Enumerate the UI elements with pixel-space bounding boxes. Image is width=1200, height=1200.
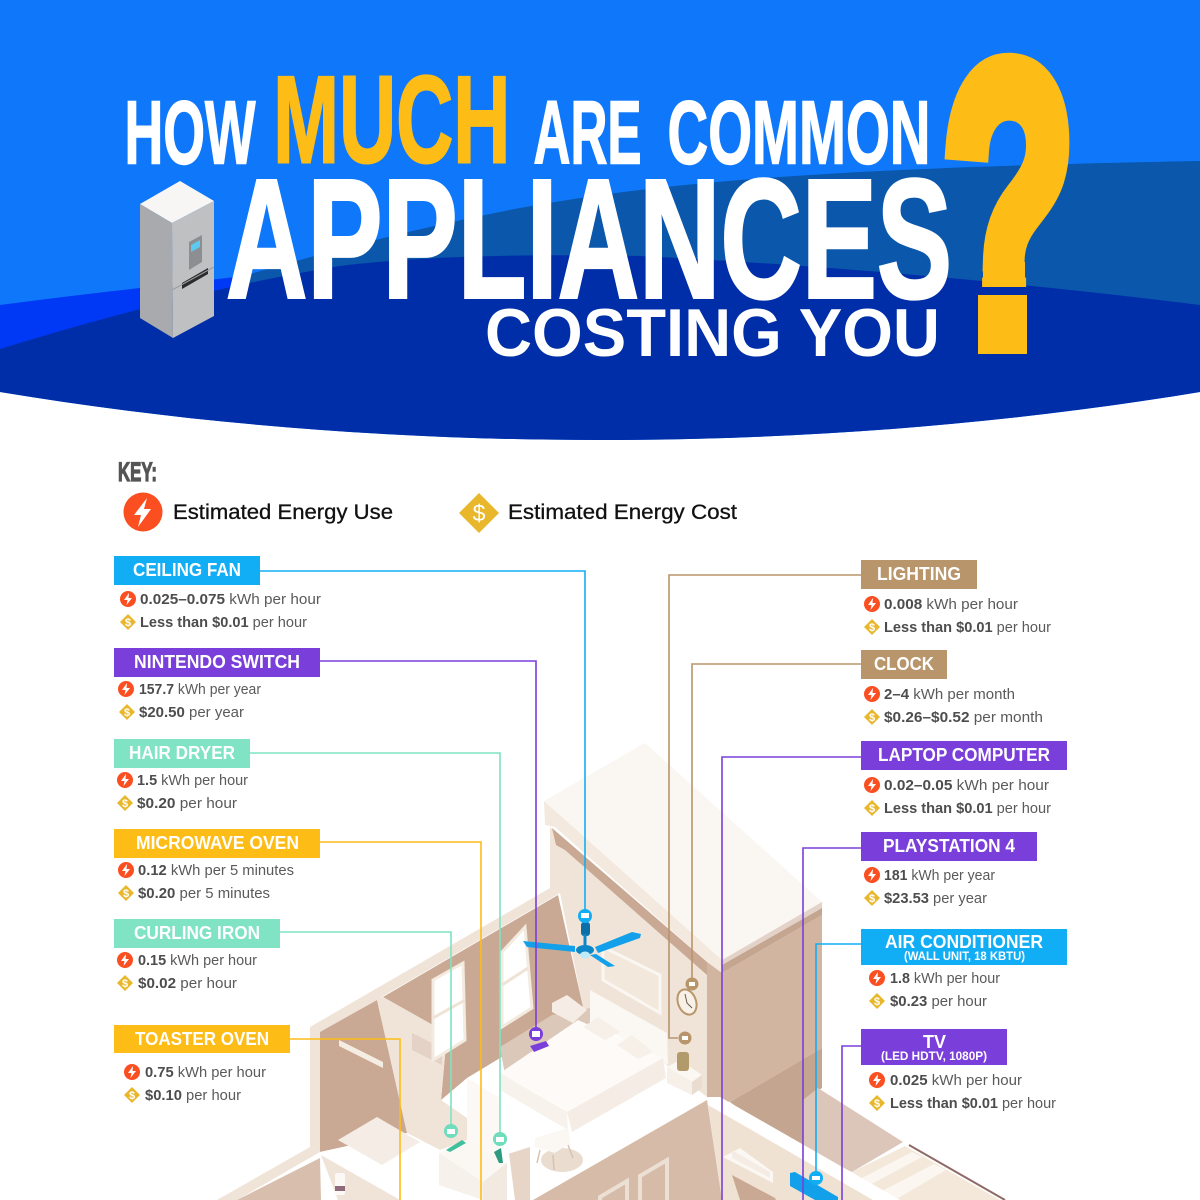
panel: curling iron: $0.02 per hour bbox=[138, 976, 237, 992]
panel: toaster oven bbox=[114, 1025, 290, 1104]
panel: tv: $ bbox=[874, 1098, 880, 1110]
panel: ceiling fan: CEILING FAN bbox=[133, 560, 241, 580]
panel: curling iron bbox=[114, 919, 280, 992]
panel: air conditioner: AIR CONDITIONER bbox=[885, 932, 1043, 952]
panel: tv: TV bbox=[923, 1032, 946, 1052]
panel: hair dryer: $ bbox=[122, 798, 128, 810]
panel: nintendo switch bbox=[114, 648, 320, 721]
key: Estimated Energy Use bbox=[173, 501, 393, 524]
panel: air conditioner: (WALL UNIT, 18 KBTU) bbox=[904, 951, 1025, 963]
bench bbox=[552, 995, 587, 1023]
panel: nintendo switch: NINTENDO SWITCH bbox=[134, 652, 300, 672]
windows bbox=[433, 927, 532, 1060]
panel: curling iron: $ bbox=[122, 978, 128, 990]
panel: air conditioner: $0.23 per hour bbox=[890, 994, 987, 1010]
panel: playstation 4: 181 kWh per year bbox=[884, 868, 995, 884]
connector end icons bbox=[444, 909, 823, 1185]
connector lines bbox=[250, 571, 861, 1200]
key: KEY: bbox=[118, 457, 157, 487]
panel: ceiling fan: Less than $0.01 per hour bbox=[140, 615, 307, 631]
roof and gable bbox=[544, 743, 903, 1172]
bedroom walls bbox=[310, 888, 583, 1152]
panel: hair dryer: 1.5 kWh per hour bbox=[137, 773, 248, 789]
panel: microwave oven bbox=[114, 829, 320, 902]
panel: playstation 4: $23.53 per year bbox=[884, 891, 987, 907]
panel: clock: $0.26–$0.52 per month bbox=[884, 710, 1043, 726]
bedroom floor bbox=[467, 1008, 707, 1188]
panel: tv bbox=[861, 1029, 1056, 1112]
panel: microwave oven: 0.12 kWh per 5 minutes bbox=[138, 863, 294, 879]
key: Estimated Energy Cost bbox=[508, 501, 737, 524]
panel: clock: $ bbox=[869, 712, 875, 724]
panel: toaster oven: $ bbox=[129, 1090, 135, 1102]
icon: refrigerator bbox=[140, 181, 214, 338]
key bbox=[118, 457, 737, 533]
panel: hair dryer bbox=[114, 739, 250, 812]
panel: curling iron: 0.15 kWh per hour bbox=[138, 953, 257, 969]
title: COSTING YOU bbox=[485, 295, 940, 371]
bed bbox=[500, 990, 668, 1132]
panel: laptop computer: Less than $0.01 per hour bbox=[884, 801, 1051, 817]
panel: curling iron: CURLING IRON bbox=[134, 923, 260, 943]
panel: lighting: 0.008 kWh per hour bbox=[884, 597, 1018, 613]
panel: hair dryer: $0.20 per hour bbox=[137, 796, 237, 812]
panel: laptop computer bbox=[861, 741, 1067, 817]
title bbox=[125, 50, 952, 371]
panel: laptop computer: $ bbox=[869, 803, 875, 815]
panel: lighting: $ bbox=[869, 622, 875, 634]
panel: laptop computer: LAPTOP COMPUTER bbox=[878, 745, 1050, 765]
panel: toaster oven: 0.75 kWh per hour bbox=[145, 1065, 266, 1081]
panel: microwave oven: $ bbox=[123, 888, 129, 900]
panel: nintendo switch: $ bbox=[124, 707, 130, 719]
panel: hair dryer: HAIR DRYER bbox=[129, 743, 235, 763]
wall clock bbox=[674, 987, 700, 1017]
panel: nintendo switch: 157.7 kWh per year bbox=[139, 682, 261, 698]
panel: laptop computer: 0.02–0.05 kWh per hour bbox=[884, 778, 1049, 794]
panel: toaster oven: $0.10 per hour bbox=[145, 1088, 241, 1104]
panel: clock: CLOCK bbox=[874, 654, 934, 674]
panel: ceiling fan: 0.025–0.075 kWh per hour bbox=[140, 592, 321, 608]
stairs bbox=[852, 1145, 1005, 1200]
panel: toaster oven: TOASTER OVEN bbox=[135, 1029, 269, 1049]
panel: clock: 2–4 kWh per month bbox=[884, 687, 1015, 703]
panel: lighting: Less than $0.01 per hour bbox=[884, 620, 1051, 636]
key: $ bbox=[473, 500, 486, 526]
chair bbox=[535, 1128, 583, 1172]
bathroom bbox=[217, 1117, 530, 1200]
panel: microwave oven: $0.20 per 5 minutes bbox=[138, 886, 270, 902]
panel: air conditioner bbox=[861, 929, 1067, 1010]
header background bbox=[0, 0, 1200, 440]
panel: lighting: LIGHTING bbox=[877, 564, 961, 584]
panel: tv: 0.025 kWh per hour bbox=[890, 1073, 1022, 1089]
devices bbox=[446, 1041, 838, 1200]
panel: ceiling fan: $ bbox=[125, 617, 131, 629]
panel: tv: Less than $0.01 per hour bbox=[890, 1096, 1056, 1112]
panel: ceiling fan bbox=[114, 556, 321, 631]
panel: playstation 4: PLAYSTATION 4 bbox=[883, 836, 1015, 856]
panel: playstation 4 bbox=[861, 832, 1037, 907]
panel: clock bbox=[861, 650, 1043, 726]
panel: microwave oven: MICROWAVE OVEN bbox=[136, 833, 299, 853]
lower rooms bbox=[533, 1097, 900, 1200]
panel: playstation 4: $ bbox=[869, 893, 875, 905]
panel: lighting bbox=[861, 560, 1051, 636]
panel: air conditioner: $ bbox=[874, 996, 880, 1008]
picture bbox=[603, 947, 660, 1013]
ceiling fan bbox=[523, 922, 641, 967]
panel: tv: (LED HDTV, 1080P) bbox=[881, 1051, 987, 1063]
panel: nintendo switch: $20.50 per year bbox=[139, 705, 244, 721]
panel: air conditioner: 1.8 kWh per hour bbox=[890, 971, 1000, 987]
nightstand and lamp bbox=[667, 1052, 702, 1095]
isometric house illustration bbox=[217, 743, 1005, 1200]
